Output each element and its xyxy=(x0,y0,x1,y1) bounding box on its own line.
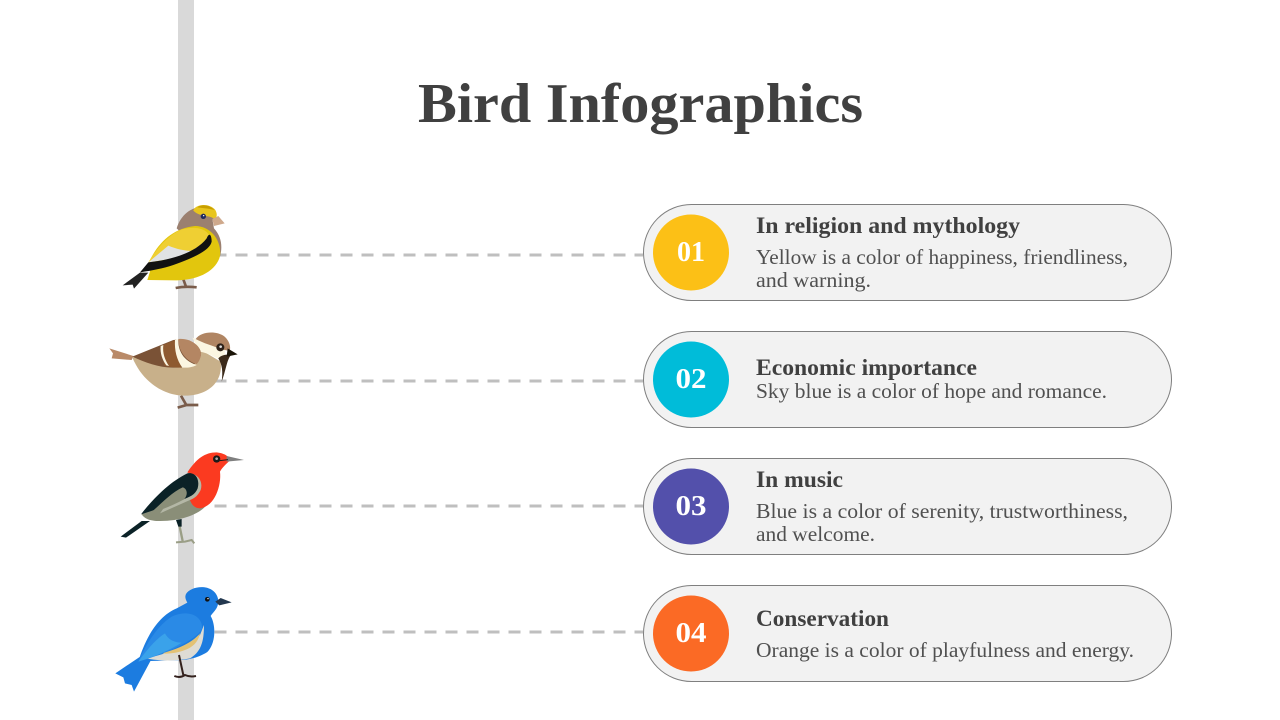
heading 01: In religion and mythology xyxy=(756,213,1020,239)
panel: 02 economic importance xyxy=(644,332,1172,428)
text 01: and warning. xyxy=(756,268,871,292)
text 01 xyxy=(756,245,1128,292)
text 03: and welcome. xyxy=(756,522,875,546)
panel: 03 in music xyxy=(644,458,1172,554)
badge 03: 03 xyxy=(676,491,706,522)
panel: 01 religion and mythology xyxy=(644,204,1172,300)
heading 04: Conservation xyxy=(756,606,889,632)
panel: 04 conservation xyxy=(644,586,1172,682)
badge 04: 04 xyxy=(676,618,706,649)
icon: blue bird xyxy=(115,587,232,692)
icon: red tanager xyxy=(121,452,244,543)
badge 02: 02 xyxy=(676,364,706,395)
text 01: Yellow is a color of happiness, friendliness, xyxy=(756,245,1128,269)
badge 01: 01 xyxy=(677,237,705,268)
heading 03: In music xyxy=(756,467,843,493)
text 04: Orange is a color of playfulness and energy. xyxy=(756,638,1134,662)
icon: yellow finch xyxy=(123,205,225,289)
heading 02: Economic importance xyxy=(756,355,977,381)
badge 01 xyxy=(653,214,729,290)
badge 02 xyxy=(653,342,729,418)
text 02: Sky blue is a color of hope and romance. xyxy=(756,379,1107,403)
badge 04 xyxy=(653,596,729,672)
title: Bird Infographics xyxy=(418,73,863,135)
icon: brown sparrow xyxy=(109,333,238,408)
text 03 xyxy=(756,499,1128,546)
badge 03 xyxy=(653,468,729,544)
text 03: Blue is a color of serenity, trustworthiness, xyxy=(756,499,1128,523)
